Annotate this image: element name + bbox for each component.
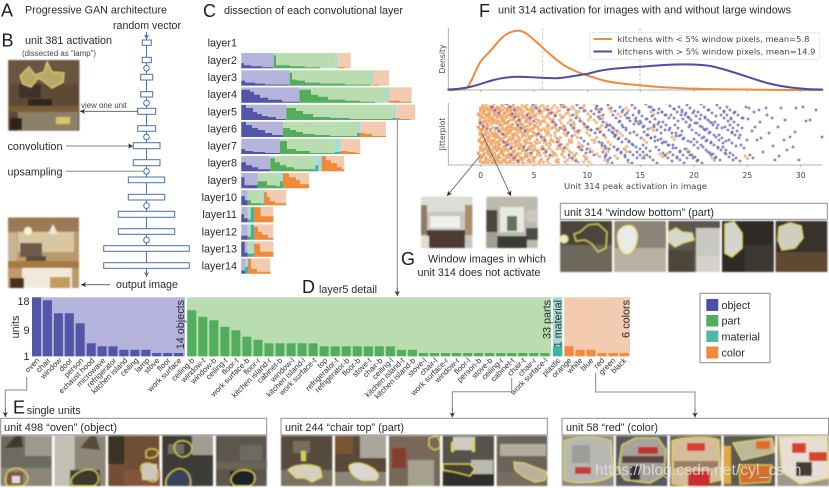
rotated bar labels: window: [38, 356, 64, 382]
label E: E: [13, 398, 25, 418]
axis labels: units: [10, 315, 22, 338]
rotated bar labels: stove: [142, 356, 161, 376]
layer labels: layer2: [208, 55, 237, 67]
layer labels: layer10: [202, 192, 237, 204]
density chart: [438, 28, 822, 92]
rotated bar labels: ceiling: [118, 356, 140, 378]
label and arrow: upsampling: [8, 166, 143, 178]
output kitchen photo: [8, 218, 79, 288]
rotated bar labels: white: [564, 356, 584, 376]
layer labels: layer13: [202, 244, 237, 256]
title bar: [560, 203, 827, 219]
label and arrow: output image: output image: [116, 279, 178, 291]
layer labels: [202, 38, 237, 273]
rotated bar labels: window-t: [179, 355, 208, 385]
label A: A: [1, 0, 13, 20]
rotated bar labels: floor-l: [452, 356, 473, 376]
layer labels: layer5: [208, 106, 237, 118]
rotated bar labels: lamp: [133, 356, 152, 374]
density legend: kitchens with > 5% window pixels, mean=14.9: [618, 48, 816, 56]
heading: unit 381 activation: unit 381 activation: [25, 35, 112, 47]
arrow to unit image: [80, 110, 138, 112]
panel G: window images without activation: [401, 197, 546, 279]
label: view one unit: view one unit: [81, 101, 128, 110]
rotated bar labels: floor-r: [242, 356, 263, 377]
rotated bar labels: stove-l: [406, 356, 429, 379]
density legend: [590, 32, 819, 59]
x-axis tick labels: 0: [478, 171, 483, 180]
x-axis tick labels: 15: [635, 171, 645, 180]
panel B: unit 381 activation: [2, 30, 112, 131]
arrow to window image 1: [447, 156, 480, 196]
rotated bar labels: stove-b: [470, 356, 495, 381]
rotated bar labels: refrigerator-t: [304, 355, 341, 393]
x-axis title: Unit 314 peak activation in image: [564, 182, 707, 191]
rotated bar labels: door: [57, 356, 75, 373]
panel E: single units: [1, 398, 829, 486]
panel F: unit 314 activation: [438, 1, 822, 196]
label F: F: [479, 1, 490, 21]
rotated bar labels: kitchen island-t: [363, 355, 407, 399]
category count labels: 33 parts: [542, 299, 554, 339]
arrow from layer5 to detail chart: [396, 120, 398, 296]
window image 2: [486, 197, 538, 248]
caption: [418, 254, 546, 279]
label and arrow: convolution: convolution: [8, 141, 63, 153]
heading: dissection: dissection of each convolutional layer: [224, 5, 403, 17]
arrow to window image 2: [482, 133, 511, 196]
category count labels: 6 colors: [620, 299, 632, 338]
rotated bar labels: kitchen island-l: [265, 356, 308, 399]
label and arrow: output image: [81, 279, 178, 291]
rotated bar labels: floor-b: [340, 356, 363, 378]
rotated bar labels: orange: [550, 356, 573, 380]
rotated bar labels: floor: [155, 356, 173, 373]
rotated bar labels: window-b: [188, 356, 219, 386]
rotated bar labels: window-l: [268, 356, 297, 385]
x-axis tick labels: 5: [532, 171, 537, 180]
label and arrow: convolution: [8, 141, 133, 153]
rotated bar labels: [23, 355, 628, 401]
title text: unit 314 “window bottom” (part): [564, 207, 714, 219]
unit 244 chair top title bar: [281, 418, 547, 435]
rotated bar labels: work surface-r: [408, 356, 451, 398]
image strip: [560, 221, 827, 272]
legend: part: [722, 316, 740, 328]
rotated bar labels: kitchen island: [90, 356, 129, 396]
part bars: [187, 310, 549, 356]
heading: layer5 detail: layer5 detail: [319, 284, 377, 296]
layer labels: layer3: [208, 72, 237, 84]
rotated bar labels: cabinet-b: [255, 356, 285, 385]
unit 498 images: [1, 436, 267, 486]
x-axis tick labels: 20: [689, 171, 699, 180]
rotated bar labels: red: [592, 356, 606, 370]
window image 1: [421, 197, 472, 248]
connector arrows to single units: [5, 373, 695, 418]
rotated bar labels: green: [597, 356, 617, 377]
layer labels: layer14: [202, 261, 237, 273]
layer labels: layer12: [202, 226, 237, 238]
panel D: layer5 detail: [5, 277, 695, 418]
layer labels: layer9: [208, 175, 237, 187]
heading: unit 314 activation for images with and without large windows: [498, 4, 792, 16]
axis labels: 1: [23, 351, 30, 363]
rotated bar labels: floor-t: [220, 355, 241, 377]
watermark: https://blog.csdn.net/cyl_csdn_1: [595, 462, 819, 479]
rotated bar labels: oven: [23, 356, 41, 374]
rotated bar labels: work surface: [145, 356, 183, 394]
layer labels: layer4: [208, 89, 237, 101]
legend: object: [722, 300, 750, 312]
rotated bar labels: cabinet-t: [489, 355, 517, 384]
label B: B: [2, 30, 14, 50]
rotated bar labels: chair-l: [418, 356, 440, 377]
note: dissected as lamp: (dissected as “lamp”): [22, 49, 96, 58]
layer labels: layer7: [208, 141, 237, 153]
rotated bar labels: work surface-l: [508, 356, 550, 397]
x-axis tick labels: 30: [796, 171, 806, 180]
category count labels: [175, 299, 632, 349]
material bar: [553, 346, 562, 356]
jitter plot: [438, 103, 822, 167]
rotated bar labels: top: [315, 356, 330, 370]
rotated bar labels: chair-t: [506, 355, 528, 378]
object bars: [32, 297, 183, 356]
detail backgrounds: [32, 297, 630, 356]
color bars: [565, 346, 629, 356]
legend: color: [722, 348, 745, 360]
category count labels: 14 objects: [175, 299, 187, 349]
rotated bar labels: ceiling-b: [170, 356, 197, 383]
rotated bar labels: window-r: [432, 356, 462, 385]
x-axis tick labels: [478, 171, 806, 180]
rotated bar labels: work surface-b: [208, 356, 252, 399]
label G: G: [401, 249, 415, 269]
rotated bar labels: refrigerator: [85, 356, 119, 389]
legend: material: [722, 332, 760, 344]
panel A: Progressive GAN architecture: [1, 0, 189, 291]
unit 58 images: [562, 436, 829, 486]
rotated bar labels: work surface-t: [277, 355, 319, 398]
rotated bar labels: chair-r: [516, 356, 539, 378]
label: random vector: random vector: [113, 20, 181, 32]
layer labels: layer6: [208, 123, 237, 135]
caption: unit 314 does not activate: [418, 267, 540, 279]
layer labels: layer8: [208, 158, 237, 170]
rotated bar labels: exhaust hood: [57, 356, 96, 396]
rotated bar labels: refrigerator-b: [313, 356, 352, 394]
unit 244 title: unit 244 “chair top” (part): [285, 422, 404, 434]
axis labels: [10, 296, 30, 363]
caption: Window images in which: [428, 254, 546, 266]
stacked layer bars: [241, 53, 415, 274]
axis labels: 9: [23, 325, 30, 337]
label C: C: [203, 1, 216, 21]
panel: unit 314 window bottom: [560, 203, 827, 272]
x-axis tick labels: 25: [742, 171, 752, 180]
rotated bar labels: blue: [579, 356, 595, 373]
density legend: kitchens with < 5% window pixels, mean=5.8: [618, 35, 810, 44]
layer labels: layer1: [208, 38, 237, 50]
rotated bar labels: ceiling-l: [370, 356, 396, 381]
label and arrow: upsampling: upsampling: [8, 166, 62, 178]
layer labels: layer11: [202, 209, 237, 221]
rotated bar labels: person: [62, 356, 85, 379]
rotated bar labels: plastic: [540, 356, 562, 378]
axis labels: 18: [17, 296, 30, 308]
rotated bar labels: chair-b: [361, 356, 385, 379]
lamp activation photo: [8, 60, 79, 131]
unit 58 red title bar: [562, 418, 828, 435]
rotated bar labels: stove-t: [350, 355, 374, 379]
x-axis tick labels: 10: [582, 171, 592, 180]
heading: Progressive GAN architecture: Progressive GAN architecture: [25, 4, 167, 16]
rotated bar labels: ceiling-r: [480, 356, 506, 382]
rotated bar labels: black: [609, 356, 628, 375]
unit 498 oven title bar: [1, 418, 267, 435]
rotated bar labels: person-b: [455, 356, 484, 384]
unit 498 title: unit 498 “oven” (object): [4, 422, 117, 434]
network diagram: [104, 32, 189, 277]
legend: [700, 293, 770, 363]
unit 244 images: [281, 436, 547, 486]
panel C: dissection of each convolutional layer: [202, 1, 415, 296]
rotated bar labels: kitchen island-r: [230, 356, 274, 399]
rotated bar labels: microwave: [75, 356, 107, 389]
label D: D: [302, 277, 315, 297]
heading: single units: single units: [27, 405, 81, 417]
jitter plot: Jitterplot: [438, 118, 447, 151]
unit 58 title: unit 58 “red” (color): [566, 422, 658, 434]
rotated bar labels: kitchen island-b: [373, 356, 418, 401]
category count labels: 1 material: [552, 300, 564, 347]
density chart: Density: [438, 44, 447, 73]
rotated bar labels: chair: [34, 356, 53, 374]
rotated bar labels: ceiling-t: [204, 355, 230, 381]
